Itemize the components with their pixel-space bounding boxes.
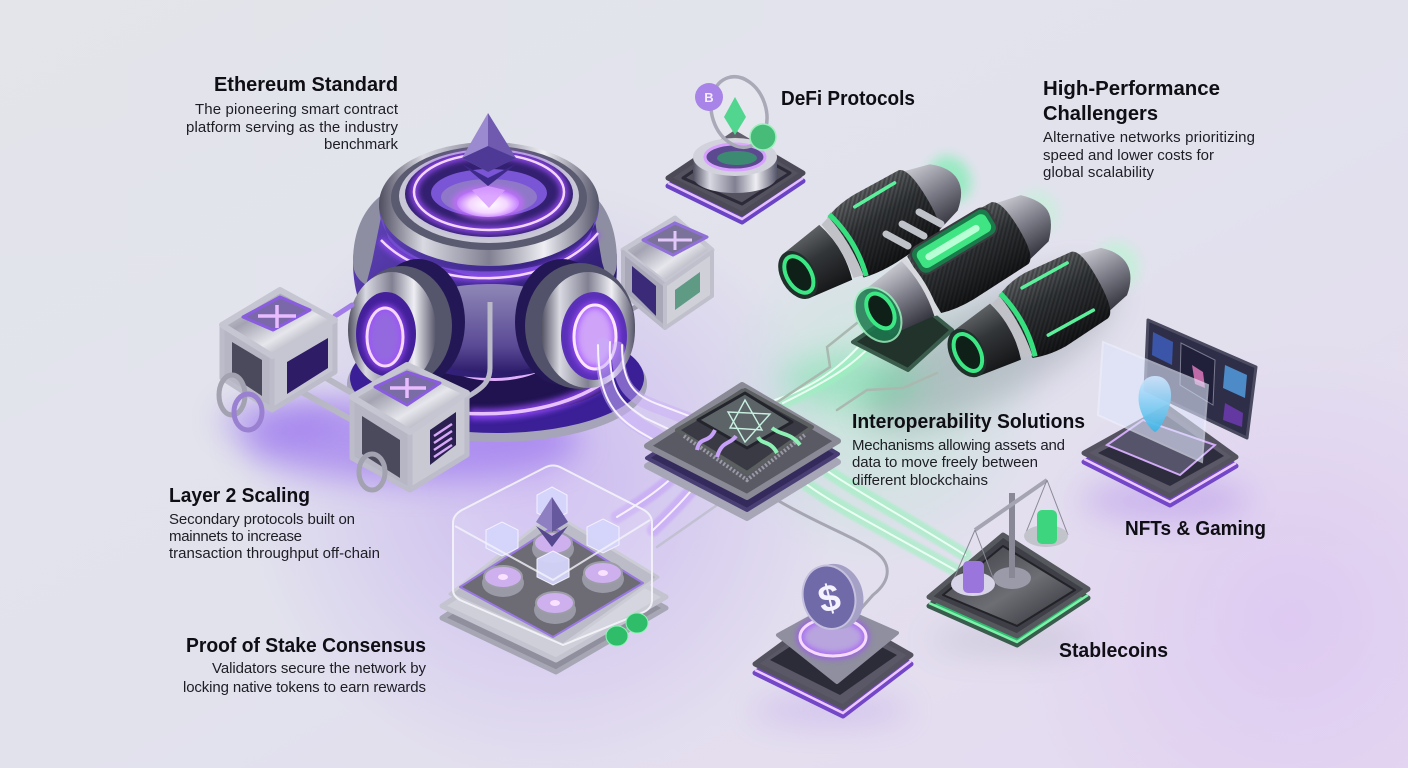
front engine <box>932 221 1159 398</box>
heading: High-Performance Challengers <box>1043 78 1255 181</box>
heading: High-Performance Challengers: Challengers <box>1043 103 1158 125</box>
stake diamond <box>536 497 568 547</box>
green flows <box>770 323 965 570</box>
heading: Layer 2 Scaling <box>169 485 380 562</box>
rear engine <box>763 138 990 318</box>
reactor body <box>353 170 617 378</box>
heading: Layer 2 Scaling: mainnets to increase <box>169 528 302 545</box>
engine cradle <box>853 300 952 370</box>
glass case <box>453 466 652 645</box>
icon: interoperability chip <box>647 385 838 518</box>
heading: Layer 2 Scaling: Secondary protocols built on <box>169 511 355 528</box>
engine cross bars rear <box>886 212 941 246</box>
heading: Proof of Stake Consensus: locking native tokens to earn rewards <box>183 679 426 696</box>
heading: Ethereum Standard: The pioneering smart contract <box>195 101 399 118</box>
reactor top rings <box>379 142 599 266</box>
heading: Interoperability Solutions: different blockchains <box>852 472 988 489</box>
glass cubes <box>486 487 619 585</box>
icon: proof of stake glass case <box>442 466 666 672</box>
stablecoin wire <box>777 500 887 612</box>
hologram <box>1098 342 1208 462</box>
floor shadows and glow <box>220 240 1250 722</box>
dollar coin <box>796 558 870 637</box>
middle engine <box>839 172 1077 356</box>
heading: Proof of Stake Consensus <box>183 635 426 696</box>
heading: Interoperability Solutions: data to move freely between <box>852 454 1038 471</box>
heading: Ethereum Standard: benchmark <box>324 136 398 153</box>
heading: Ethereum Standard: platform serving as the industry <box>186 119 398 136</box>
DeFi ring <box>702 69 776 155</box>
icon: high performance engines <box>763 138 1159 398</box>
icon: ethereum diamond <box>462 113 516 208</box>
chip flows <box>697 428 800 457</box>
balance scale <box>951 480 1068 596</box>
reactor base <box>347 323 647 442</box>
heading: DeFi Protocols: DeFi Protocols <box>781 88 915 110</box>
token B <box>695 83 723 111</box>
icon: Ethereum core reactor <box>347 113 647 442</box>
right port <box>515 259 635 389</box>
heading: Stablecoins: Stablecoins <box>1059 640 1168 662</box>
heading: Ethereum Standard: Ethereum Standard <box>214 74 398 96</box>
reactor output flows <box>598 342 705 455</box>
dollar coin: $ <box>814 576 845 622</box>
heading: High-Performance Challengers: global scalability <box>1043 164 1154 181</box>
connector bars between cubes <box>290 305 352 420</box>
purple flows lower <box>617 450 720 547</box>
cube ring <box>359 454 385 490</box>
icon: reactor rear cube <box>612 218 712 328</box>
left port <box>348 259 465 388</box>
DeFi puck <box>693 138 777 193</box>
heading: High-Performance Challengers: speed and lower costs for <box>1043 147 1214 164</box>
center pipe <box>466 302 490 398</box>
heading: Proof of Stake Consensus: Proof of Stake Consensus <box>186 635 426 657</box>
icon: DeFi platform <box>668 69 803 222</box>
token B: B <box>704 90 714 105</box>
heading: High-Performance Challengers: High-Performance <box>1043 78 1220 100</box>
icon: cube left <box>219 290 335 430</box>
icon: scale platform <box>929 480 1088 645</box>
connectors: data flows <box>617 323 965 612</box>
NFT screen <box>1145 320 1256 438</box>
reactor collar <box>379 205 599 280</box>
heading: Layer 2 Scaling: transaction throughput off-chain <box>169 545 380 562</box>
engine cross bars front <box>962 254 1014 289</box>
heading: Proof of Stake Consensus: Validators secure the network by <box>212 660 426 677</box>
heading: High-Performance Challengers: Alternative networks prioritizing <box>1043 129 1255 146</box>
icon: stablecoin platform <box>755 558 911 716</box>
heading: NFTs & Gaming: NFTs & Gaming <box>1125 518 1266 540</box>
cube rings <box>219 375 262 430</box>
heading: Interoperability Solutions: Mechanisms allowing assets and <box>852 437 1065 454</box>
icon: cube front <box>352 365 467 490</box>
icon: NFT platform <box>1084 320 1256 505</box>
heading: Layer 2 Scaling: Layer 2 Scaling <box>169 485 310 507</box>
green tokens <box>606 613 648 646</box>
heading: Interoperability Solutions <box>852 411 1085 489</box>
heading: Ethereum Standard <box>186 74 399 153</box>
chip network glyph <box>728 400 770 442</box>
stake pods <box>482 532 624 624</box>
heading: Interoperability Solutions: Interoperability Solutions <box>852 411 1085 433</box>
